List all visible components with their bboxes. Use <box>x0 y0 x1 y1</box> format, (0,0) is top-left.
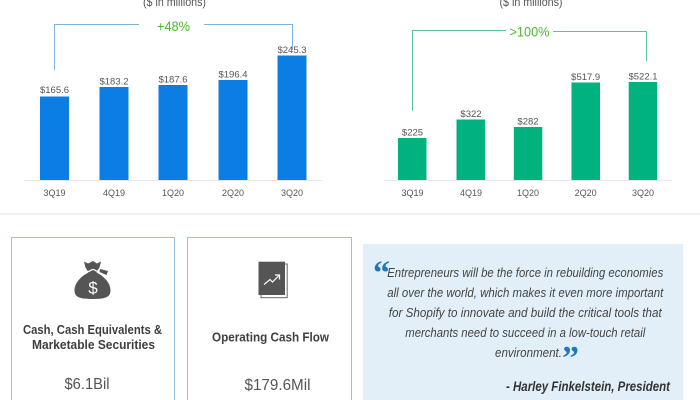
panel: executive quote <box>363 244 683 400</box>
icon: money bag <box>74 261 110 299</box>
card title: Marketable Securities <box>32 338 155 352</box>
bar: 2Q20 <box>571 72 600 198</box>
growth label: >100% <box>510 24 550 40</box>
panel: cash card <box>12 238 174 400</box>
bar: 3Q20: 3Q20 <box>281 188 303 198</box>
bar: 3Q20: 3Q20 <box>632 188 654 198</box>
bar: 2Q20: $517.9 <box>571 72 600 83</box>
bracket: growth from 3Q19 to 3Q20 <box>54 24 292 70</box>
bar: 4Q19 <box>99 76 129 198</box>
bar: 3Q19: 3Q19 <box>401 188 424 198</box>
panel: blue bar chart <box>24 0 322 198</box>
bracket: growth from 3Q19 to 3Q20 <box>412 30 646 111</box>
quote text: environment. <box>495 346 562 360</box>
quote text: for Shopify to innovate and build the critical tools that <box>389 306 662 320</box>
icon: report with trend arrow <box>258 262 287 298</box>
bar: 3Q19: 3Q19 <box>43 188 66 198</box>
bar: 1Q20 <box>514 116 542 198</box>
bar: 2Q20 <box>218 70 248 198</box>
bar: 4Q19: 4Q19 <box>460 188 482 198</box>
bar: 4Q19: 4Q19 <box>103 188 125 198</box>
bar: 4Q19: $322 <box>460 109 482 120</box>
icon: closing quote mark: ” <box>562 340 579 377</box>
bar: 4Q19: $183.2 <box>99 76 129 88</box>
bar: 4Q19 <box>456 109 485 198</box>
panel: operating cash flow card <box>188 238 352 400</box>
card title: Operating Cash Flow <box>212 330 329 344</box>
card value: $6.1Bil <box>64 376 110 393</box>
bar: 3Q19 <box>398 128 426 198</box>
bar: 1Q20 <box>158 74 188 198</box>
bar: 3Q19: $225 <box>402 128 423 138</box>
growth label: +48% <box>157 18 190 34</box>
bar: 3Q20 <box>628 72 658 198</box>
quote text: merchants need to succeed in a low-touch retail <box>405 326 646 340</box>
icon: money bag: $ <box>88 278 98 298</box>
bar: 1Q20: 1Q20 <box>162 188 184 198</box>
bar: 2Q20: $196.4 <box>218 70 248 80</box>
bar: 1Q20: $187.6 <box>158 74 188 86</box>
quote text: Entrepreneurs will be the force in rebuilding economies <box>387 266 663 280</box>
bar: 3Q19 <box>40 85 69 198</box>
icon: opening quote mark: “ <box>373 255 390 292</box>
bar: 3Q20: $522.1 <box>628 72 658 82</box>
bar: 1Q20: 1Q20 <box>517 188 539 198</box>
card value: $179.6Mil <box>244 377 310 394</box>
bar: 3Q19: $165.6 <box>40 85 69 96</box>
quote attribution: - Harley Finkelstein, President <box>506 379 670 394</box>
panel: green bar chart <box>384 0 672 198</box>
quote text: all over the world, which makes it even more important <box>387 286 664 300</box>
bar: 1Q20: $282 <box>517 116 539 128</box>
bar: 3Q20: $245.3 <box>277 45 307 56</box>
card title: Cash, Cash Equivalents & <box>23 323 162 337</box>
bar: 2Q20: 2Q20 <box>575 188 597 198</box>
bar: 2Q20: 2Q20 <box>222 188 244 198</box>
bar: 3Q20 <box>277 45 307 198</box>
